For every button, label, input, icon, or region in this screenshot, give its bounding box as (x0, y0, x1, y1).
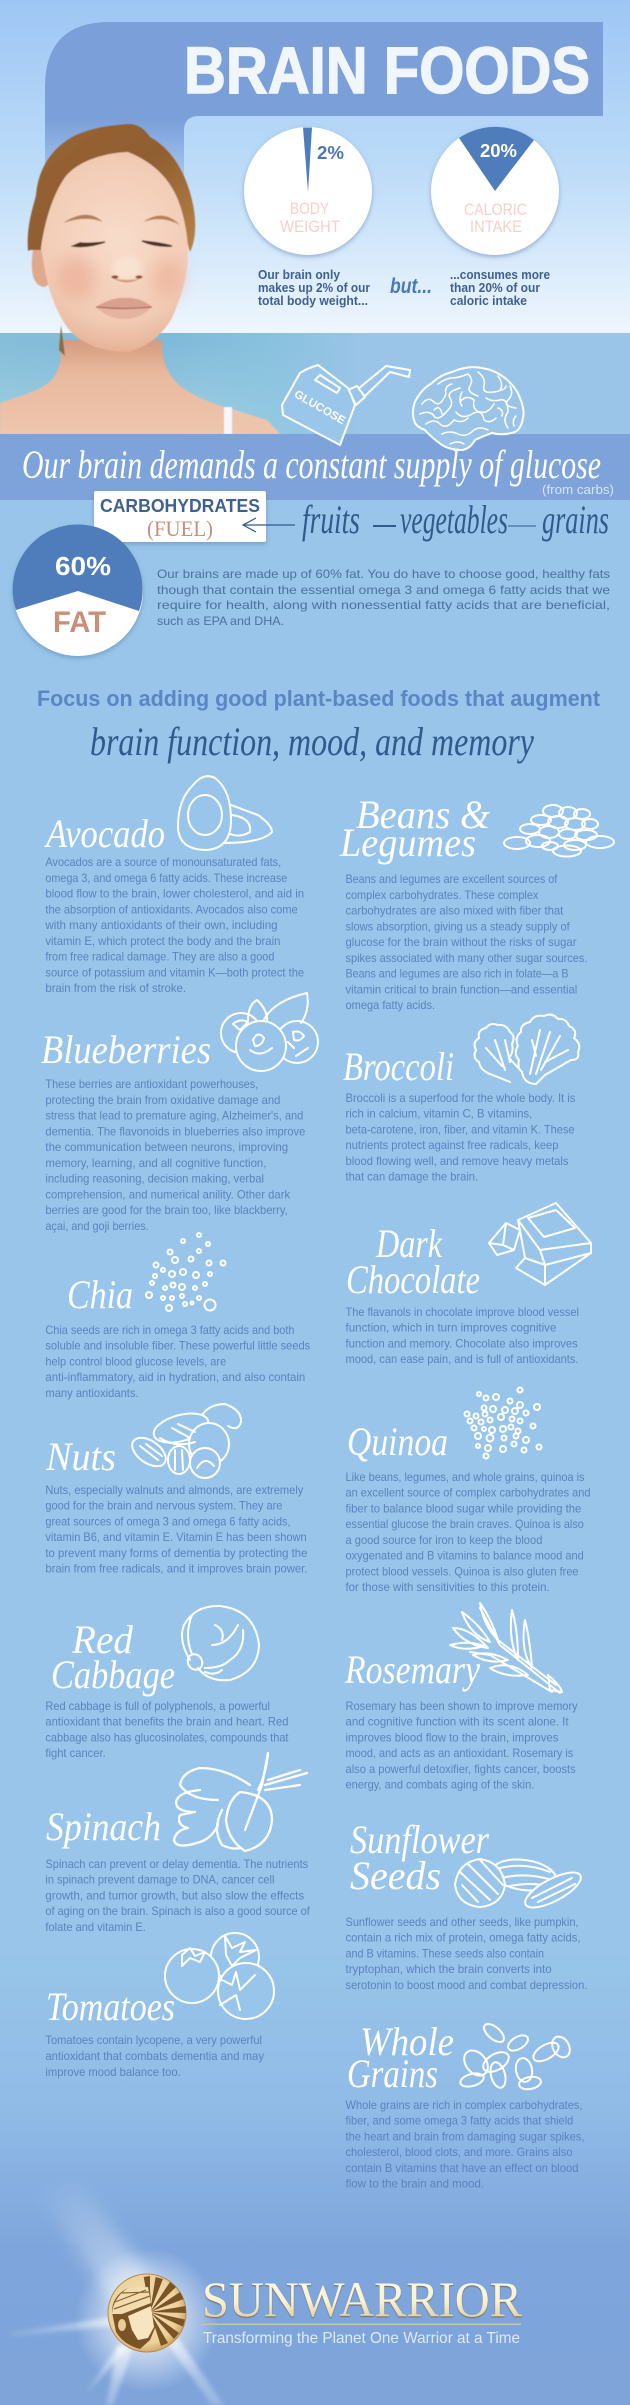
carbohydrates box: CARBOHYDRATES (100, 496, 260, 516)
icon: broccoli (475, 1015, 579, 1084)
caption: body weight: total body weight... (258, 293, 368, 308)
panel: broccoli (343, 1015, 579, 1184)
text: quinoa: protect blood vessels. Quinoa is also gluten free (346, 1566, 578, 1578)
caption: body weight: makes up 2% of our (258, 280, 370, 295)
panel: sunflower seeds: Seeds (350, 1853, 441, 1898)
text: blueberries: protecting the brain from oxidative damage and (45, 1094, 280, 1107)
text: avocado (44, 856, 304, 995)
text: beans: omega fatty acids. (346, 999, 435, 1012)
panel: chia: Chia (67, 1272, 133, 1317)
icon: glucose can: GLUCOSE (292, 388, 347, 427)
panel: dark chocolate: Chocolate (346, 1257, 480, 1302)
icon: brain (413, 367, 524, 450)
panel: whole grains: Whole (360, 2019, 454, 2064)
text: broccoli (346, 1092, 575, 1184)
panel: quinoa (346, 1388, 590, 1594)
sunburst glow (10, 2185, 224, 2405)
heading: brain function: brain function, mood, and memory (90, 719, 534, 764)
text: chocolate: The flavanols in chocolate improve blood vessel (346, 1306, 579, 1319)
text: cabbage: fight cancer. (45, 1747, 106, 1760)
pie chart: body weight: 2% (317, 143, 344, 163)
text: blueberries: berries are good for the brain too, like blackberry, (45, 1204, 288, 1217)
logo rule (201, 2324, 521, 2325)
caption: body weight (258, 267, 370, 308)
carbohydrates box: (FUEL) (147, 516, 213, 541)
text: cabbage (45, 1700, 289, 1760)
text: sunflower: tryptophan, which the brain converts into (346, 1963, 552, 1976)
pie chart: caloric intake: INTAKE (470, 217, 522, 236)
text: blueberries: including reasoning, decision making, verbal (45, 1172, 264, 1186)
heading: focus: Focus on adding good plant-based foods that augment (37, 686, 601, 711)
text: blueberries: açai, and goji berries. (45, 1220, 149, 1233)
text: rosemary: also a powerful detoxifier, fights cancer, boosts (346, 1763, 576, 1776)
panel: blueberries: Blueberries (41, 1027, 211, 1072)
text: grains: cholesterol, blood clots, and more. Grains also (346, 2146, 572, 2159)
header panel (45, 22, 603, 205)
fat paragraph: though that contain the essential omega 3 and omega 6 fatty acids that we (157, 583, 610, 597)
text: chia: soluble and insoluble fiber. These powerful little seeds (45, 1340, 310, 1352)
note: from carbs: (from carbs) (542, 482, 614, 497)
panel: blueberries (41, 993, 318, 1233)
tagline: Transforming the Planet One Warrior at a Time (203, 2330, 520, 2347)
icon: beans (504, 805, 614, 856)
text: beans: slows absorption, giving us a steady supply of (346, 920, 570, 933)
text: spinach (45, 1858, 311, 1934)
panel: red cabbage: Cabbage (51, 1652, 175, 1697)
text: quinoa: for those with sensitivities to this protein. (346, 1581, 550, 1594)
text: tomatoes: Tomatoes contain lycopene, a very powerful (45, 2034, 262, 2047)
pie chart: body weight (244, 127, 372, 255)
text: spinach: folate and vitamin E. (45, 1921, 146, 1934)
panel: avocado: Avocado (43, 811, 165, 856)
text: quinoa: fiber to balance blood sugar while providing the (346, 1502, 581, 1516)
text: chocolate: mood, can ease pain, and is full of antioxidants. (346, 1353, 578, 1366)
text: chocolate: function and memory. Chocolate also improves (346, 1337, 578, 1350)
text: avocado: with many antioxidants of their own, including (44, 919, 278, 932)
panel: rosemary (344, 1603, 578, 1792)
panel: spinach: Spinach (46, 1804, 161, 1849)
text: beans: Beans and legumes are also rich in folate—a B (346, 968, 569, 980)
chart: 60% fat: 60% (55, 551, 111, 581)
carbohydrate sources (302, 497, 609, 542)
text: nuts: Nuts, especially walnuts and almonds, are extremely (45, 1484, 303, 1497)
text: nuts: vitamin B6, and vitamin E. Vitamin E has been shown (45, 1531, 307, 1544)
text: spinach: Spinach can prevent or delay dementia. The nutrients (45, 1858, 308, 1871)
icon: grains (459, 2021, 573, 2091)
logo wordmark: SUNWARRIOR (202, 2271, 523, 2327)
fat paragraph (157, 567, 610, 628)
text: chia: anti-inflammatory, aid in hydration, and also contain (45, 1371, 305, 1384)
text: cabbage: Red cabbage is full of polyphenols, a powerful (45, 1700, 270, 1713)
text: chia (45, 1324, 310, 1400)
text: blueberries: the communication between neurons, improving (45, 1141, 288, 1154)
panel: chia (45, 1233, 310, 1400)
text: avocado: brain from the risk of stroke. (45, 982, 186, 995)
text: beans: Beans and legumes are excellent sources of (346, 873, 558, 886)
text: broccoli: Broccoli is a superfood for the whole body. It is (346, 1092, 575, 1105)
text: tomatoes: antioxidant that combats dementia and may (45, 2050, 264, 2063)
chart: 60% fat: FAT (53, 606, 106, 639)
text: blueberries: dementia. The flavonoids in blueberries also improve (45, 1125, 305, 1138)
text: cabbage: cabbage also has glucosinolates, compounds that (45, 1732, 289, 1744)
panel: tomatoes (45, 1933, 274, 2079)
text: rosemary: Rosemary has been shown to improve memory (346, 1700, 578, 1713)
caption: caloric intake: ...consumes more (450, 267, 550, 282)
text: quinoa: oxygenated and B vitamins to balance mood and (346, 1550, 584, 1563)
connector word: but... (390, 275, 432, 298)
text: quinoa (346, 1471, 590, 1594)
text: blueberries: These berries are antioxidant powerhouses, (45, 1078, 258, 1091)
panel: whole grains: Grains (347, 2051, 438, 2096)
fat paragraph: Our brains are made up of 60% fat. You do have to choose good, healthy fats (157, 567, 610, 581)
text: rosemary (346, 1700, 578, 1792)
text: avocado: from free radical damage. They are also a good (45, 950, 274, 964)
panel: spinach (45, 1753, 311, 1934)
text: avocado: Avocados are a source of monounsaturated fats, (45, 856, 281, 869)
text: beans: spikes associated with many other sugar sources. (346, 952, 587, 965)
text: chia: many antioxidants. (45, 1387, 139, 1400)
panel: dark chocolate: Dark (375, 1221, 443, 1266)
pie chart: body weight: BODY (290, 199, 329, 218)
text: avocado: source of potassium and vitamin K—both protect the (45, 966, 304, 979)
fat paragraph: require for health, along with nonessential fatty acids that are beneficial, (157, 598, 610, 612)
text: nuts: to prevent many forms of dementia by protecting the (45, 1547, 307, 1560)
panel: beans and legumes (339, 792, 614, 1012)
icon: avocado (178, 776, 272, 850)
text: spinach: growth, and tumor growth, but also slow the effects (45, 1890, 304, 1902)
text: quinoa: a good source for iron to keep the blood (346, 1534, 542, 1547)
text: grains: the heart and brain from damaging sugar spikes, (346, 2130, 584, 2144)
panel: quinoa: Quinoa (347, 1419, 448, 1464)
text: beans: glucose for the brain without the risks of sugar (346, 936, 577, 949)
panel: beans and legumes: Beans & (356, 792, 490, 837)
icon: seeds (455, 1856, 586, 1914)
caption: caloric intake (450, 267, 550, 308)
fat paragraph: such as EPA and DHA. (157, 614, 284, 628)
text: broccoli: nutrients protect against free radicals, keep (346, 1139, 558, 1152)
pie chart: caloric intake (431, 127, 559, 255)
text: sunflower: contain a rich mix of protein, omega fatty acids, (346, 1932, 580, 1945)
text: avocado: vitamin E, which protect the body and the brain (45, 935, 280, 948)
panel: sunflower seeds (346, 1817, 587, 1992)
text: sunflower (346, 1916, 587, 1992)
text: tomatoes: improve mood balance too. (45, 2066, 181, 2079)
text: quinoa: essential glucose the brain craves. Quinoa is also (346, 1518, 584, 1531)
text: broccoli: that can damage the brain. (346, 1170, 478, 1184)
panel: red cabbage: Red (71, 1617, 134, 1662)
panel: rosemary: Rosemary (344, 1647, 480, 1692)
text: nuts: good for the brain and nervous system. They are (45, 1500, 282, 1513)
text: chocolate: function, which in turn improves cognitive (346, 1322, 556, 1334)
icon: spinach (174, 1753, 307, 1851)
text: beans (346, 873, 587, 1012)
caption: body weight: Our brain only (258, 267, 341, 282)
text: rosemary: improves blood flow to the brain, improves (346, 1732, 559, 1744)
text: avocado: the absorption of antioxidants. Avocados also come (45, 903, 298, 916)
text: rosemary: mood, and acts as an antioxidant. Rosemary is (346, 1747, 573, 1760)
text: sunflower: serotonin to boost mood and combat depression. (346, 1979, 587, 1992)
panel: avocado (43, 776, 304, 995)
chart: 60% fat (13, 524, 143, 656)
text: spinach: in spinach prevent damage to DNA, cancer cell (45, 1874, 274, 1887)
text: broccoli: rich in calcium, vitamin C, B vitamins, (346, 1108, 532, 1120)
panel: dark chocolate (346, 1203, 591, 1366)
blue band (0, 434, 630, 500)
photo: woman with closed eyes (0, 124, 282, 434)
text: grains (346, 2099, 584, 2191)
pie chart: body weight: WEIGHT (280, 217, 340, 236)
text: chia: help control blood glucose levels, are (45, 1355, 226, 1368)
panel: nuts (45, 1404, 307, 1576)
text: chia: Chia seeds are rich in omega 3 fatty acids and both (45, 1324, 295, 1337)
icon: nuts (127, 1404, 241, 1478)
text: tomatoes (45, 2034, 264, 2079)
text: quinoa: an excellent source of complex carbohydrates and (346, 1487, 590, 1500)
pie chart: caloric intake: CALORIC (464, 200, 527, 219)
text: grains: fiber, and some omega 3 fatty acids that shield (346, 2115, 573, 2128)
text: grains: Whole grains are rich in complex carbohydrates, (346, 2099, 582, 2112)
arrow to carbohydrates (243, 518, 295, 532)
icon: blueberries (221, 993, 318, 1071)
text: chocolate (346, 1306, 579, 1366)
text: broccoli: beta-carotene, iron, fiber, and vitamin K. These (346, 1123, 574, 1136)
panel: nuts: Nuts (45, 1434, 116, 1479)
text: avocado: omega 3, and omega 6 fatty acids. These increase (45, 872, 287, 885)
logo: sunwarrior coin (108, 2274, 186, 2352)
icon: chocolate (489, 1203, 591, 1285)
carbohydrate sources: vegetables (400, 497, 508, 542)
panel: broccoli: Broccoli (343, 1044, 454, 1089)
caption: caloric intake: caloric intake (450, 293, 527, 308)
panel: tomatoes: Tomatoes (46, 1984, 175, 2029)
carbohydrate sources: fruits (302, 497, 360, 542)
text: blueberries: stress that lead to premature aging, Alzheimer's, and (45, 1110, 303, 1122)
caption: caloric intake: than 20% of our (450, 280, 540, 295)
text: spinach: of aging on the brain. Spinach is also a good source of (45, 1905, 311, 1918)
text: rosemary: energy, and combats aging of the skin. (346, 1779, 534, 1792)
panel: red cabbage (45, 1606, 289, 1760)
text: grains: contain B vitamins that have an effect on blood (346, 2162, 578, 2175)
text: grains: flow to the brain and mood. (346, 2178, 484, 2191)
icon: tomatoes (165, 1933, 274, 2019)
text: rosemary: and cognitive function with its scent alone. It (346, 1716, 569, 1729)
icon: rosemary (450, 1603, 562, 1693)
text: blueberries: memory, learning, and all cognitive function, (45, 1157, 266, 1170)
pie chart: caloric intake: 20% (480, 141, 517, 161)
text: nuts: brain from free radicals, and it improves brain power. (45, 1563, 307, 1576)
icon: glucose can (282, 365, 410, 445)
panel: sunflower seeds: Sunflower (350, 1817, 489, 1862)
panel: beans and legumes: Legumes (339, 820, 476, 865)
carbohydrates box (94, 491, 266, 542)
text: nuts (45, 1484, 307, 1576)
text: avocado: blood flow to the brain, lower cholesterol, and aid in (45, 888, 304, 900)
icon: cabbage (182, 1606, 259, 1680)
panel: whole grains (346, 2019, 584, 2191)
icon: quinoa (464, 1388, 542, 1458)
text: sunflower: and B vitamins. These seeds also contain (346, 1948, 544, 1960)
text: quinoa: Like beans, legumes, and whole grains, quinoa is (346, 1471, 585, 1484)
text: nuts: great sources of omega 3 and omega 6 fatty acids, (45, 1516, 291, 1528)
text: beans: vitamin critical to brain function—and essential (346, 983, 577, 996)
text: cabbage: antioxidant that benefits the brain and heart. Red (45, 1716, 289, 1729)
text: beans: carbohydrates are also mixed with fiber that (346, 904, 564, 918)
text: beans: complex carbohydrates. These complex (346, 889, 539, 902)
text: blueberries (45, 1078, 305, 1233)
text: sunflower: Sunflower seeds and other seeds, like pumpkin, (346, 1916, 578, 1929)
text: broccoli: blood flowing well, and remove heavy metals (346, 1155, 569, 1168)
text: blueberries: comprehension, and numerical anility. Other dark (45, 1188, 290, 1201)
icon: chia seeds (146, 1233, 226, 1311)
